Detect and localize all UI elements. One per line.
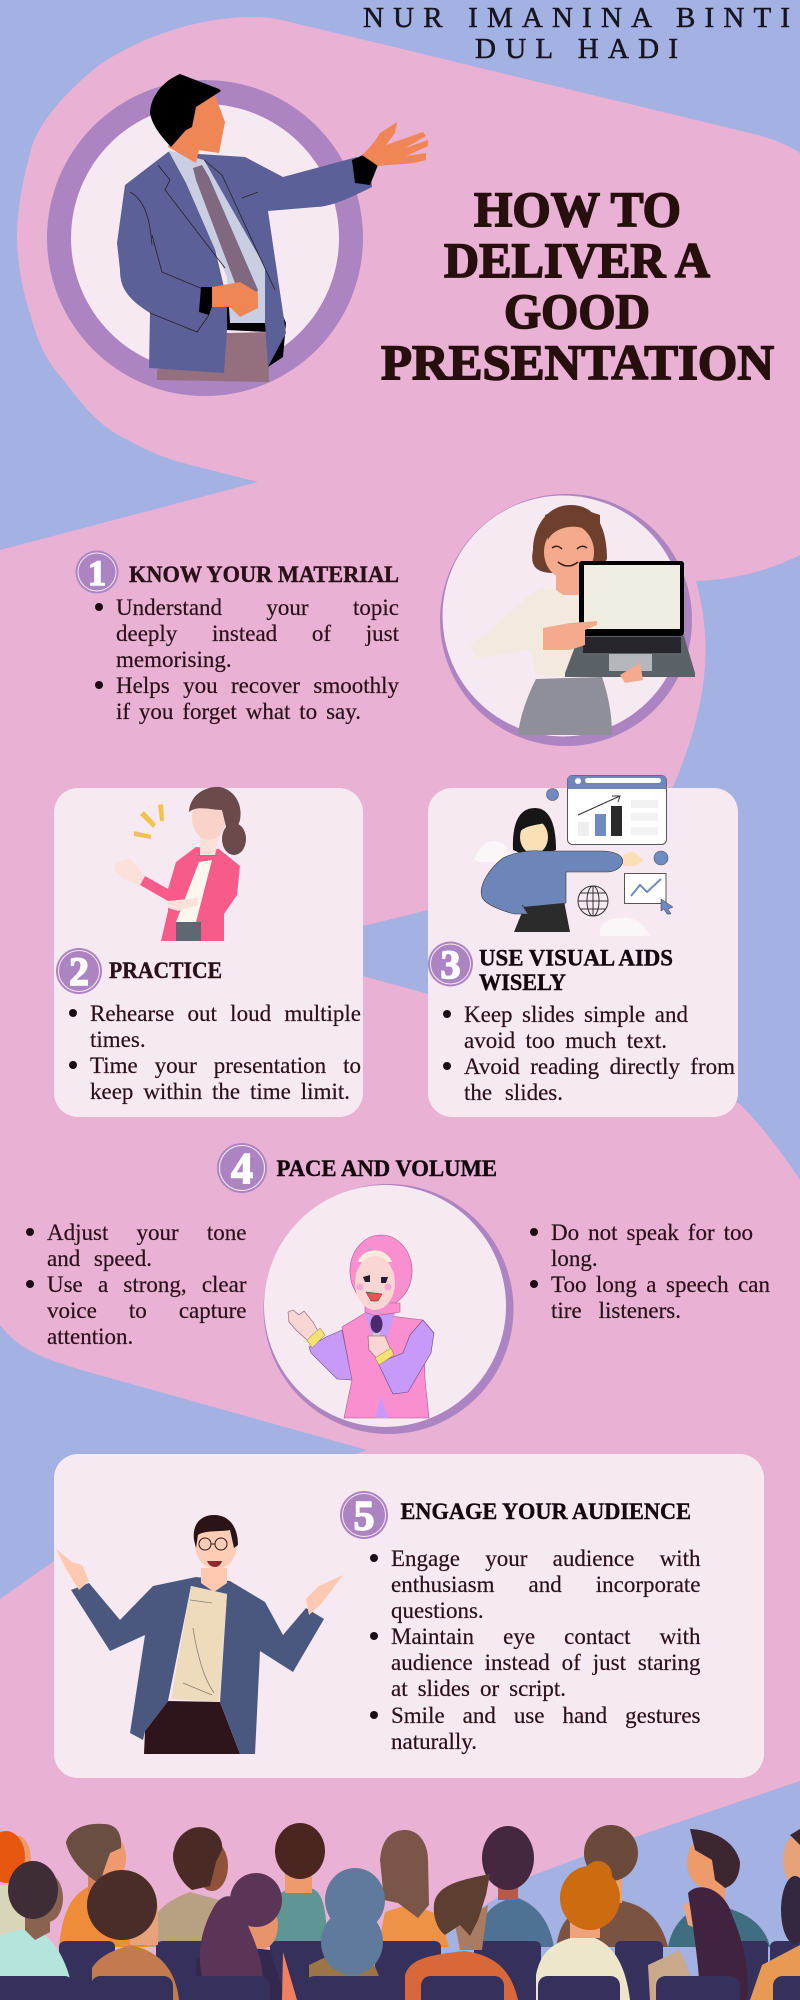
illustration: woman holding laptop — [440, 494, 695, 746]
text block: step 5 bullets: naturally. — [391, 1729, 477, 1754]
text block: step 5 bullets: at slides or script. — [391, 1676, 566, 1701]
background: left blue shape — [0, 1325, 367, 1599]
text block: step 4 right bullets — [530, 1220, 770, 1323]
text block: step 4 right bullets: long. — [551, 1246, 598, 1271]
text block: step 3 bullets: avoid too much text. — [464, 1028, 667, 1053]
text block: step 4 left bullets: attention. — [47, 1324, 133, 1349]
step 3 badge — [428, 942, 473, 987]
title: GOOD — [504, 283, 650, 339]
title: DELIVER A — [444, 232, 710, 288]
step 4 heading: PACE AND VOLUME — [276, 1156, 497, 1181]
text block: step 3 bullets: Keep slides simple and — [464, 1002, 688, 1027]
text block: step 3 bullets: Avoid reading directly from — [464, 1054, 735, 1079]
text block: step 4 left bullets: and speed. — [47, 1246, 152, 1271]
back row of audience — [0, 1823, 800, 1950]
text block: step 4 right bullets: Too long a speech can — [551, 1272, 770, 1297]
title — [381, 181, 774, 390]
step 4 badge — [217, 1143, 267, 1193]
author name: DUL HADI — [475, 33, 678, 65]
panel: step 2 card — [54, 787, 363, 1117]
step 1 badge — [76, 550, 118, 594]
text block: step 1 bullets: if you forget what to say. — [116, 699, 361, 724]
panel: step 3 card — [428, 776, 738, 1117]
text block: step 2 bullets: times. — [90, 1027, 146, 1052]
text block: step 1 bullets: deeply instead of just — [116, 621, 399, 646]
illustration: man with glasses gesturing — [56, 1515, 343, 1754]
text block: step 4 right bullets: Do not speak for too — [551, 1220, 753, 1245]
text block: step 2 bullets: Time your presentation to — [90, 1053, 361, 1078]
text block: step 3 bullets — [443, 1002, 735, 1105]
step 3 heading — [479, 946, 673, 995]
background: top blue shape — [0, 0, 800, 550]
text block: step 1 bullets: Understand your topic — [116, 595, 399, 620]
step 5 badge: 5 — [354, 1494, 374, 1540]
text block: step 5 bullets: audience instead of just staring — [391, 1650, 700, 1675]
title: PRESENTATION — [381, 334, 774, 390]
step 5 heading: ENGAGE YOUR AUDIENCE — [400, 1499, 691, 1524]
step 5 badge — [340, 1491, 388, 1540]
title: HOW TO — [474, 181, 681, 237]
text block: step 1 bullets: Helps you recover smoothly — [116, 673, 399, 698]
step 3 heading: WISELY — [479, 970, 566, 995]
author name — [363, 2, 790, 65]
front row seats — [0, 1976, 800, 2000]
step 1 badge: 1 — [88, 553, 106, 593]
text block: step 5 bullets: questions. — [391, 1598, 484, 1623]
step 2 badge — [56, 948, 102, 994]
text block: step 5 bullets — [370, 1546, 700, 1754]
text block: step 4 left bullets: voice to capture — [47, 1298, 246, 1323]
text block: step 5 bullets: enthusiasm and incorporate — [391, 1572, 700, 1597]
text block: step 4 left bullets: Adjust your tone — [47, 1220, 246, 1245]
text block: step 5 bullets: Smile and use hand gestures — [391, 1703, 700, 1728]
step 2 badge: 2 — [69, 949, 89, 994]
illustration: woman in pink jacket — [114, 787, 246, 941]
text block: step 2 bullets: keep within the time limit. — [90, 1079, 350, 1104]
text block: step 5 bullets: Engage your audience with — [391, 1546, 700, 1571]
step 3 heading: USE VISUAL AIDS — [479, 946, 673, 970]
text block: step 2 bullets: Rehearse out loud multiple — [90, 1001, 361, 1026]
illustration: audience in seats — [0, 1823, 800, 2000]
text block: step 2 bullets — [69, 1001, 361, 1104]
illustration: presenter man in circle — [47, 74, 428, 396]
step 2 heading: PRACTICE — [109, 958, 222, 983]
illustration: woman presenting charts — [474, 776, 673, 936]
step 3 badge: 3 — [440, 942, 460, 987]
text block: step 4 right bullets: tire listeners. — [551, 1298, 681, 1323]
step 1 heading: KNOW YOUR MATERIAL — [129, 562, 399, 587]
step 4 badge: 4 — [231, 1144, 253, 1193]
text block: step 1 bullets — [95, 595, 399, 724]
back row seats — [59, 1941, 800, 2000]
text block: step 5 bullets: Maintain eye contact with — [391, 1624, 700, 1649]
text block: step 4 left bullets — [26, 1220, 246, 1349]
author name: NUR IMANINA BINTI — [363, 2, 790, 34]
front row of audience — [0, 1861, 800, 2000]
background: bottom blue shape — [400, 1781, 800, 2000]
text block: step 1 bullets: memorising. — [116, 647, 232, 672]
text block: step 3 bullets: the slides. — [464, 1080, 563, 1105]
background: right blue shape — [300, 555, 800, 1180]
text block: step 4 left bullets: Use a strong, clear — [47, 1272, 246, 1297]
panel: step 5 card — [54, 1454, 764, 1778]
illustration: woman in hijab with microphone — [264, 1184, 514, 1434]
